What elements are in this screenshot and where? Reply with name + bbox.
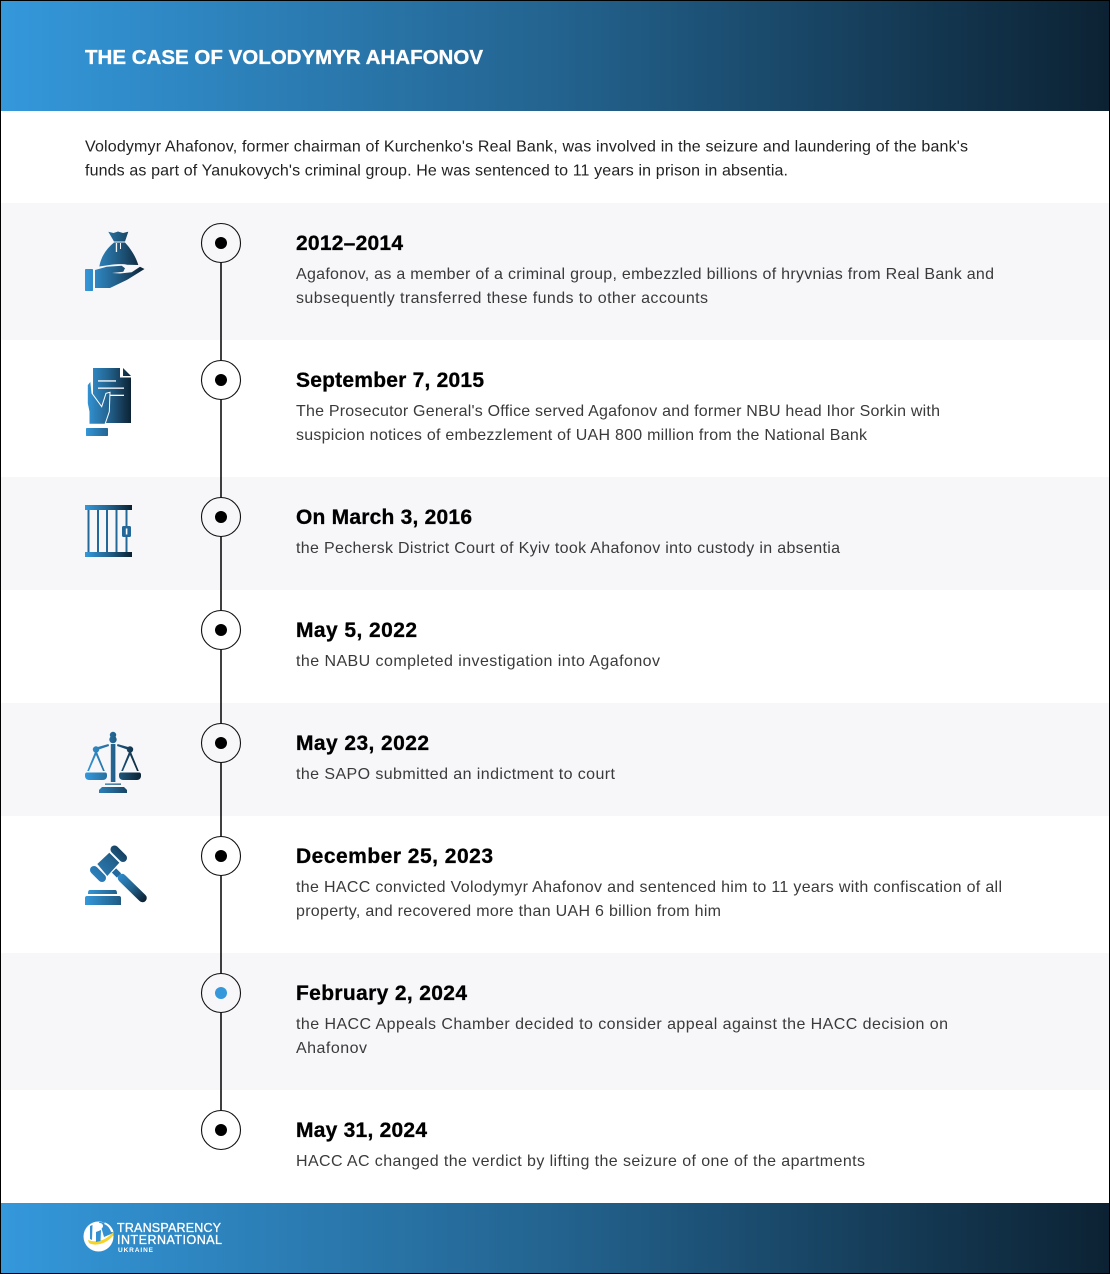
logo: Transparency International Ukraine: INTERNATIONAL <box>117 1233 222 1247</box>
entry: May 31, 2024 <box>296 1119 865 1170</box>
logo: Transparency International Ukraine: TRANSPARENCY <box>117 1221 222 1235</box>
entry: May 31, 2024: May 31, 2024 <box>296 1119 427 1142</box>
entry: May 31, 2024: HACC AC changed the verdict by lifting the seizure of one of the apartments <box>296 1153 865 1170</box>
entry: 2012–2014 <box>296 232 994 307</box>
logo: Transparency International Ukraine <box>84 1221 222 1254</box>
entry: February 2, 2024 <box>296 982 948 1057</box>
entry: December 25, 2023: December 25, 2023 <box>296 845 493 868</box>
entry: 2012–2014: subsequently transferred these funds to other accounts <box>296 290 708 307</box>
entry: May 23, 2022: May 23, 2022 <box>296 732 429 755</box>
marker: February 2, 2024 (highlighted) <box>202 974 240 1012</box>
entry: February 2, 2024: February 2, 2024 <box>296 982 467 1005</box>
timeline axis <box>202 224 240 1150</box>
entry: May 5, 2022 <box>296 619 660 670</box>
entry: December 25, 2023: property, and recovered more than UAH 6 billion from him <box>296 903 721 920</box>
entry: May 23, 2022: the SAPO submitted an indictment to court <box>296 766 616 783</box>
entry: May 5, 2022: May 5, 2022 <box>296 619 417 642</box>
entry: On March 3, 2016: the Pechersk District Court of Kyiv took Ahafonov into custody in absentia <box>296 540 840 557</box>
icon: hand holding document <box>86 368 131 436</box>
marker: March 3, 2016 <box>202 498 240 536</box>
entry: May 5, 2022: the NABU completed investigation into Agafonov <box>296 653 660 670</box>
intro text: Volodymyr Ahafonov, former chairman of Kurchenko's Real Bank, was involved in the seizure and laundering of the bank's <box>85 138 968 156</box>
entry: February 2, 2024: the HACC Appeals Chamber decided to consider appeal against the HACC decision on <box>296 1016 948 1033</box>
entry: February 2, 2024: Ahafonov <box>296 1040 367 1057</box>
footer banner <box>1 1203 1109 1273</box>
entry: September 7, 2015 <box>296 369 940 444</box>
icon: prison bars <box>85 505 132 557</box>
marker: September 7, 2015 <box>202 360 240 400</box>
entry: December 25, 2023 <box>296 845 1002 920</box>
icon: scales of justice <box>85 732 141 793</box>
icon: gavel <box>85 850 142 905</box>
marker: May 31, 2024 <box>202 1110 240 1150</box>
marker: December 25, 2023 <box>202 836 240 876</box>
entry: December 25, 2023: the HACC convicted Volodymyr Ahafonov and sentenced him to 11 years with confiscation of all <box>296 879 1002 896</box>
entry: 2012–2014: Agafonov, as a member of a criminal group, embezzled billions of hryvnias from Real Bank and <box>296 266 994 283</box>
entry: 2012–2014: 2012–2014 <box>296 232 403 255</box>
intro text <box>85 138 968 180</box>
title: THE CASE OF VOLODYMYR AHAFONOV <box>85 46 483 69</box>
marker: 2012–2014 <box>202 224 240 262</box>
intro text: funds as part of Yanukovych's criminal group. He was sentenced to 11 years in prison in absentia. <box>85 162 788 180</box>
header banner <box>1 1 1109 111</box>
entry: May 23, 2022 <box>296 732 616 783</box>
entry: September 7, 2015: suspicion notices of embezzlement of UAH 800 million from the National Bank <box>296 427 868 444</box>
icon: money bag on hand <box>85 232 144 291</box>
row backgrounds <box>1 203 1109 1090</box>
entry: On March 3, 2016: On March 3, 2016 <box>296 506 472 529</box>
entry: September 7, 2015: The Prosecutor General's Office served Agafonov and former NBU head Ihor Sorkin with <box>296 403 940 420</box>
entry: On March 3, 2016 <box>296 506 840 557</box>
entry: September 7, 2015: September 7, 2015 <box>296 369 484 392</box>
marker: May 23, 2022 <box>202 724 240 762</box>
logo: Transparency International Ukraine: UKRAINE <box>118 1247 154 1254</box>
marker: May 5, 2022 <box>202 610 240 650</box>
